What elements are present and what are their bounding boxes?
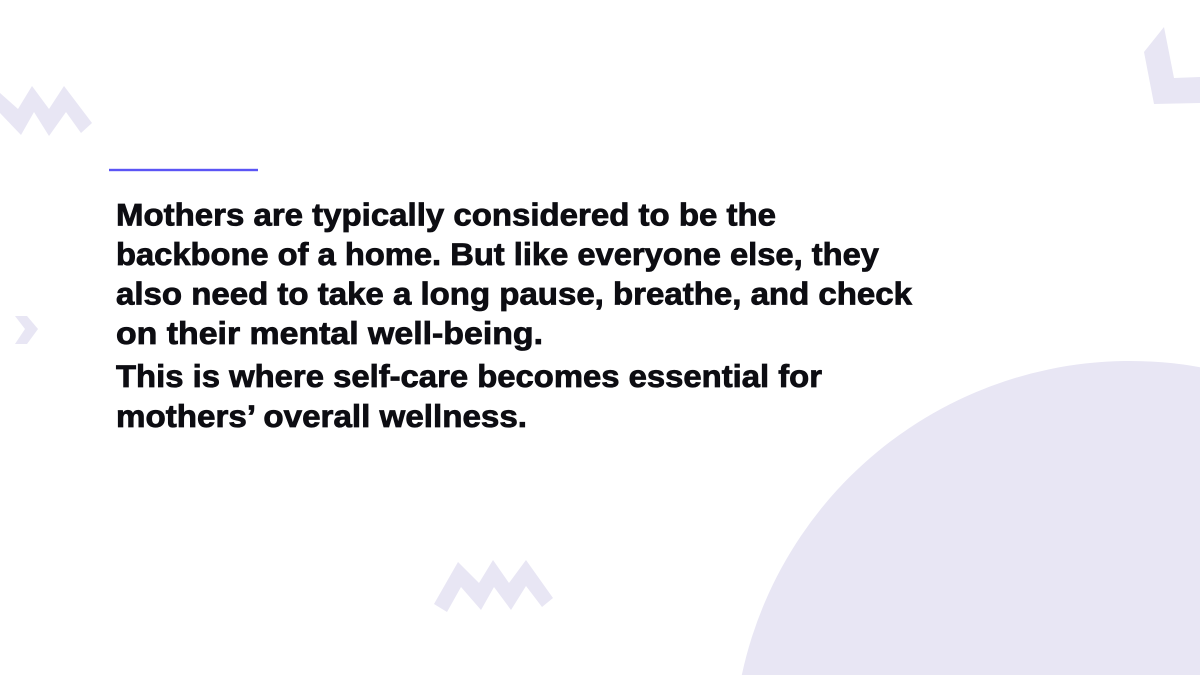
accent line	[109, 169, 258, 171]
main text block: mothers’ overall wellness.	[116, 398, 527, 434]
decorative zigzag bottom	[434, 560, 553, 612]
main text block: backbone of a home. But like everyone else, they	[116, 236, 879, 272]
decorative corner shape top right	[1144, 27, 1200, 104]
main text block	[116, 196, 912, 434]
decorative zigzag top left	[0, 86, 92, 136]
decorative chevron left	[15, 316, 38, 344]
main text block: on their mental well-being.	[116, 315, 543, 351]
main text block: Mothers are typically considered to be the	[116, 196, 776, 232]
main text block: This is where self-care becomes essential for	[116, 358, 822, 394]
decorative large circle	[742, 361, 1200, 675]
main text block: also need to take a long pause, breathe, and check	[116, 276, 912, 312]
